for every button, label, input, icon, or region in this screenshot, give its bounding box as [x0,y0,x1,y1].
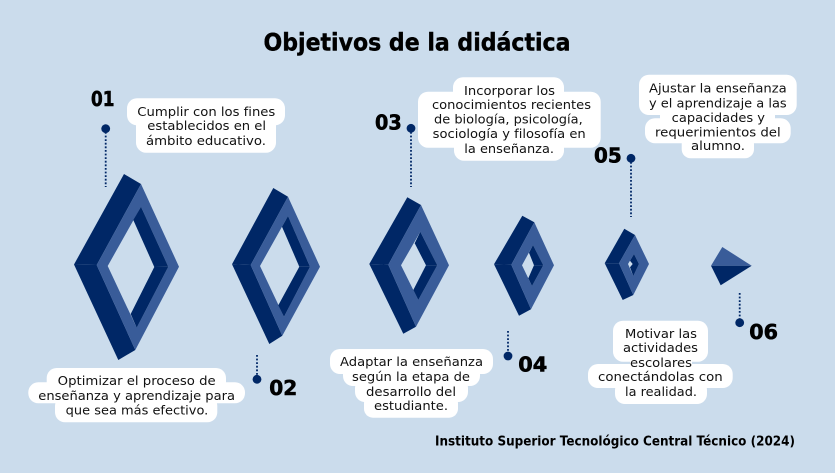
marker 01 [91,87,114,187]
callout 03: la enseñanza. [464,141,554,156]
callout 06: actividades [623,340,698,355]
marker 02 [253,355,297,400]
callout 06 [588,321,733,404]
shape: diamond 6 [711,247,752,285]
callout 01 [127,98,285,153]
callout 05: y el aprendizaje a las [649,96,787,110]
callout 04 [330,349,493,418]
callout 03: Incorporar los [464,83,555,98]
shape: diamond 4 [494,216,554,316]
marker 03 [375,110,415,187]
marker 05 [594,144,635,217]
marker 02: 02 [269,376,297,400]
footer source: Instituto Superior Tecnológico Central Técnico (2024) [435,434,795,450]
callout 02: que sea más efectivo. [66,402,208,418]
title: Objetivos de la didáctica [264,28,570,56]
callout 06: conectándolas con [598,369,723,384]
marker 03: 03 [375,110,402,134]
callout 06: Motivar las [625,326,697,341]
callout 04: estudiante. [374,398,448,413]
marker 06 [735,293,778,344]
callout 05: Ajustar la enseñanza [649,80,787,96]
callout 03: de biología, psicología, [434,112,583,126]
callout 03 [418,77,601,161]
marker 04 [504,331,547,377]
callout 02 [28,368,245,422]
callout 05: requerimientos del [655,124,781,140]
callout 06: escolares [630,355,692,370]
marker 06: 06 [749,320,778,344]
callout 02: Optimizar el proceso de [58,373,216,388]
marker 05: 05 [594,144,622,168]
callout 04: Adaptar la enseñanza [340,354,483,369]
callout 05: alumno. [691,138,745,153]
shape: diamond 1 [74,174,179,360]
callout 01: establecidos en el [147,118,266,133]
callout 04: según la etapa de [352,369,470,384]
callout 06: la realidad. [625,384,697,399]
callout 01: ámbito educativo. [146,133,266,148]
shape: diamond 5 [605,229,649,300]
callout 01: Cumplir con los fines [137,104,275,119]
callout 05 [639,75,797,158]
callout 04: desarrollo del [366,384,456,399]
callout 03: sociología y filosofía en [433,126,586,141]
callout 03: conocimientos recientes [432,97,591,112]
shape: diamond 3 [369,197,449,334]
marker 04: 04 [518,353,547,377]
marker 01: 01 [91,87,114,111]
shape: diamond 2 [232,188,320,344]
callout 02: enseñanza y aprendizaje para [38,388,235,403]
callout 05: capacidades y [672,110,766,125]
